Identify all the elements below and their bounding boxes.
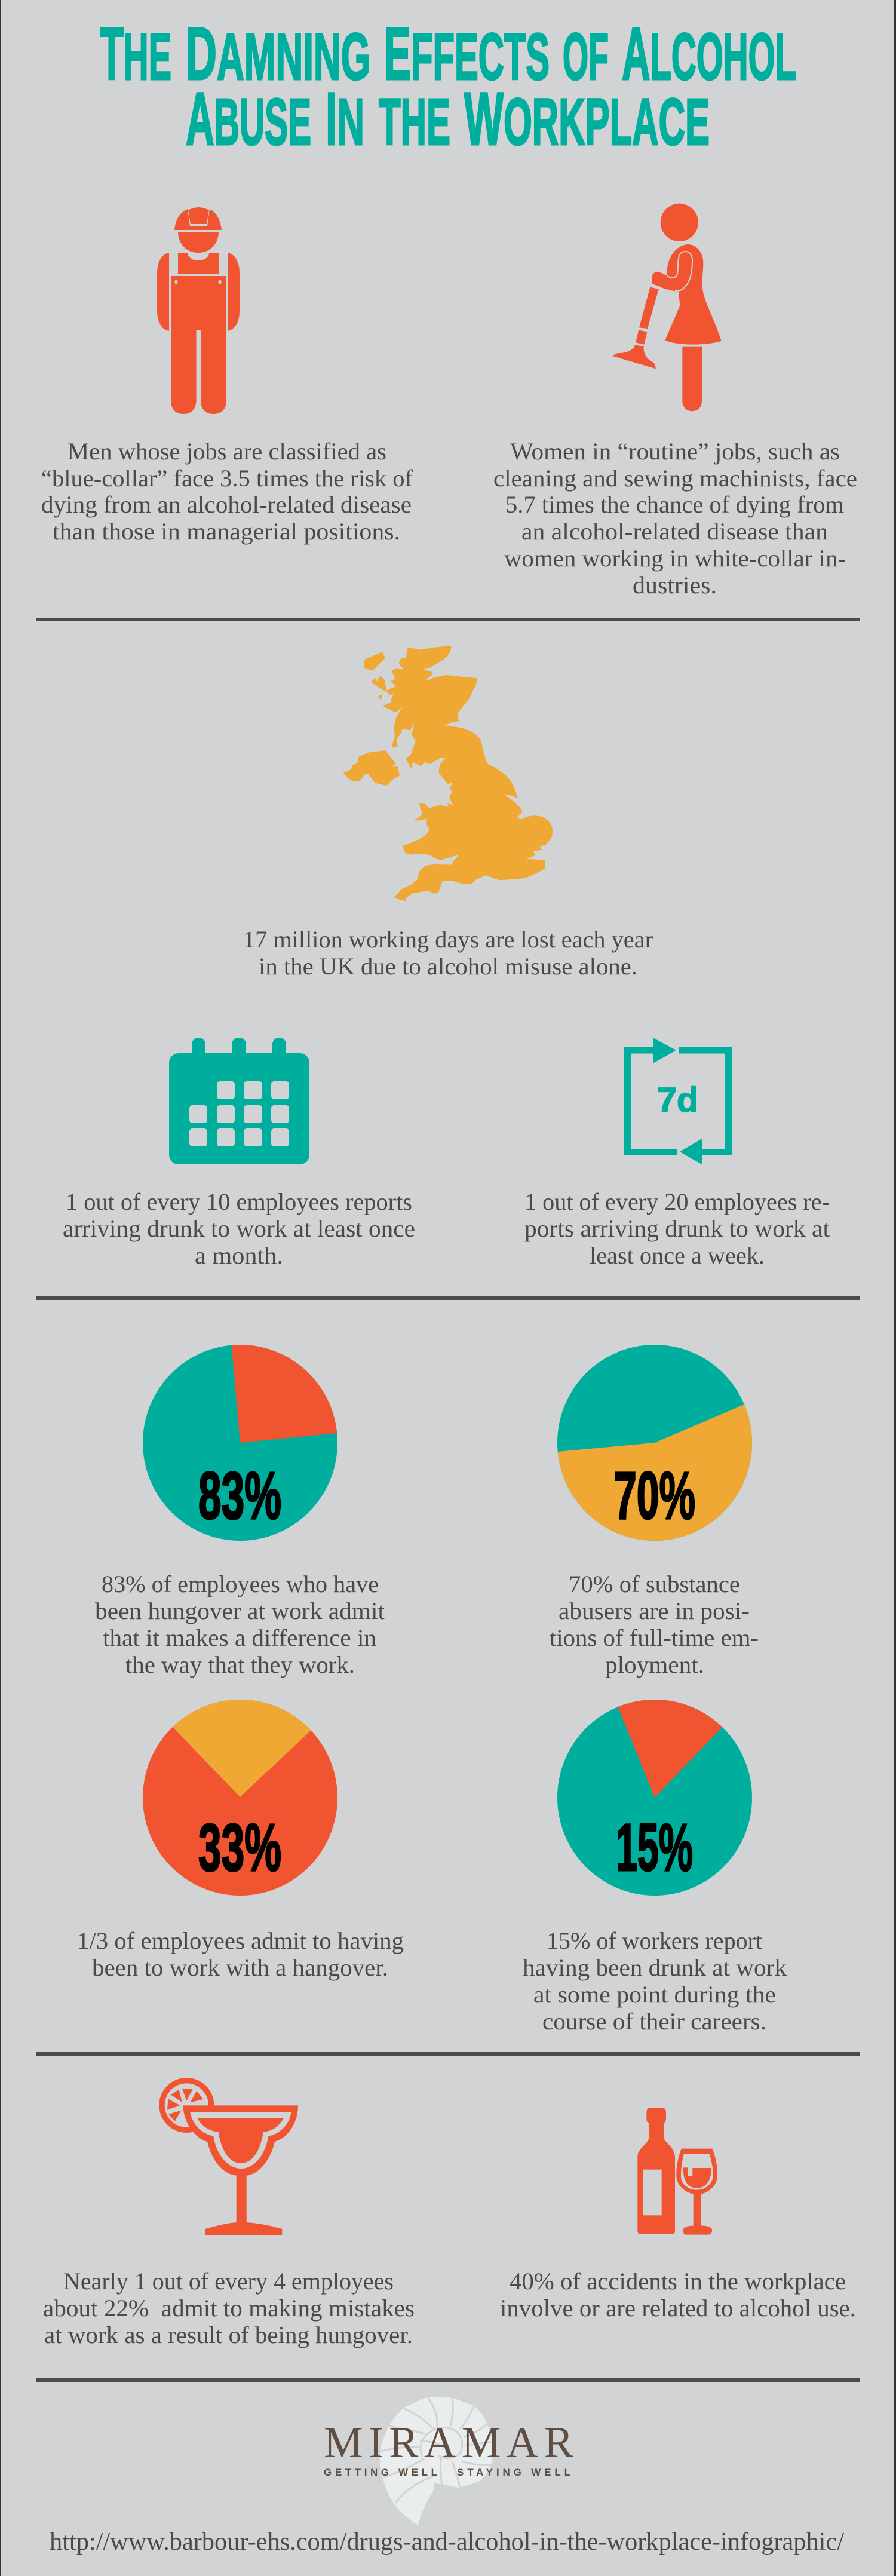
text: blue-collar statistic: Men whose jobs are classified as xyxy=(67,438,386,465)
text: blue-collar statistic: “blue-collar” face 3.5 times the risk of xyxy=(41,465,413,492)
text: 83 percent statistic: that it makes a difference in xyxy=(103,1624,376,1651)
pie chart: 15% xyxy=(557,1700,752,1896)
panel: 33 percent xyxy=(77,1700,404,1981)
text: weekly statistic: least once a week. xyxy=(590,1242,765,1269)
text: routine-job statistic: Women in “routine” jobs, such as xyxy=(510,438,840,465)
icon: calendar xyxy=(169,1038,309,1164)
title: ABUSE xyxy=(186,78,311,161)
panel: routine-job women xyxy=(493,204,857,599)
text: monthly statistic xyxy=(63,1188,415,1269)
logo: Miramar xyxy=(324,2397,574,2525)
icon: seven-day cycle xyxy=(627,1038,729,1164)
text: weekly statistic: 1 out of every 20 employees re- xyxy=(524,1188,830,1215)
text: 70 percent statistic: abusers are in posi- xyxy=(559,1597,750,1624)
title: IN xyxy=(326,78,364,161)
pie chart: 70% xyxy=(557,1345,752,1541)
panel: UK working days xyxy=(243,646,653,980)
icon: nautilus shell xyxy=(380,2397,493,2525)
text: accidents statistic: involve or are related to alcohol use. xyxy=(500,2295,856,2322)
text: weekly statistic xyxy=(524,1188,830,1269)
text: 83 percent statistic: been hungover at work admit xyxy=(95,1597,385,1624)
text: 70 percent statistic: ployment. xyxy=(605,1651,704,1678)
text: 83 percent statistic xyxy=(95,1571,385,1678)
text: accidents statistic: 40% of accidents in the workplace xyxy=(510,2268,846,2295)
text: 15 percent statistic: having been drunk at work xyxy=(523,1954,787,1981)
text: monthly statistic: a month. xyxy=(195,1242,283,1269)
text: 15 percent statistic xyxy=(523,1927,787,2035)
pie chart: 33% xyxy=(143,1700,337,1896)
text: blue-collar statistic: dying from an alcohol-related disease xyxy=(41,491,412,518)
text: hungover mistakes statistic xyxy=(43,2268,415,2348)
wordmark: MIRAMAR xyxy=(324,2418,574,2467)
pie chart: 83%: 83% xyxy=(198,1458,281,1533)
pie chart: 33%: 33% xyxy=(198,1810,281,1885)
title: OF xyxy=(563,20,609,94)
title: THE xyxy=(379,85,450,159)
text: blue-collar statistic xyxy=(41,438,413,545)
pie chart: 83% xyxy=(143,1345,337,1541)
tagline: GETTING WELL xyxy=(324,2467,437,2478)
text: 15 percent statistic: 15% of workers report xyxy=(547,1927,762,1954)
text: 83 percent statistic: the way that they work. xyxy=(125,1651,355,1678)
text: hungover mistakes statistic: Nearly 1 out of every 4 employees xyxy=(63,2268,394,2295)
text: 70 percent statistic: tions of full-time em- xyxy=(550,1624,759,1651)
text: working days lost: 17 million working days are lost each year xyxy=(243,926,653,953)
text: routine-job statistic: cleaning and sewing machinists, face xyxy=(493,465,857,492)
icon: wine bottle and glass xyxy=(637,2108,717,2235)
text: routine-job statistic: dustries. xyxy=(633,572,717,599)
panel: 83 percent xyxy=(95,1345,385,1678)
icon: construction worker xyxy=(157,207,240,414)
panel: drunk once a week xyxy=(524,1038,830,1269)
panel: drunk once a month xyxy=(63,1038,415,1269)
title: WORKPLACE xyxy=(464,78,710,161)
text: hungover mistakes statistic: about 22% admit to making mistakes xyxy=(43,2295,415,2322)
text: accidents statistic xyxy=(500,2268,856,2322)
panel: 70 percent xyxy=(550,1345,759,1678)
text: 15 percent statistic: course of their careers. xyxy=(542,2008,766,2035)
title xyxy=(100,13,796,161)
text: 70 percent statistic xyxy=(550,1571,759,1678)
title: THE xyxy=(100,13,171,96)
pie chart: 15%: 15% xyxy=(616,1810,693,1885)
text: 83 percent statistic: 83% of employees who have xyxy=(102,1571,379,1597)
pie chart: 70%: 70% xyxy=(614,1458,695,1533)
text: hungover mistakes statistic: at work as a result of being hungover. xyxy=(44,2322,413,2348)
text: 15 percent statistic: at some point during the xyxy=(533,1981,776,2008)
source URL: http://www.barbour-ehs.com/drugs-and-alcohol-in-the-workplace-infographic/ xyxy=(50,2528,844,2556)
title: DAMNING xyxy=(186,13,370,96)
text: routine-job statistic xyxy=(493,438,857,599)
title: EFFECTS xyxy=(384,13,550,96)
text: 70 percent statistic: 70% of substance xyxy=(569,1571,740,1597)
icon: cocktail glass xyxy=(159,2078,298,2235)
text: 33 percent statistic: been to work with a hangover. xyxy=(92,1954,388,1981)
text: 33 percent statistic xyxy=(77,1927,404,1981)
text: monthly statistic: arriving drunk to work at least once xyxy=(63,1215,415,1242)
text: working days lost xyxy=(243,926,653,980)
tagline: STAYING WELL xyxy=(457,2467,570,2478)
text: monthly statistic: 1 out of every 10 employees reports xyxy=(66,1188,412,1215)
tagline xyxy=(324,2467,570,2478)
panel: workplace accidents xyxy=(500,2108,856,2322)
panel: blue-collar men xyxy=(41,207,413,545)
text: 33 percent statistic: 1/3 of employees admit to having xyxy=(77,1927,404,1954)
text: routine-job statistic: women working in white-collar in- xyxy=(504,545,846,572)
text: working days lost: in the UK due to alcohol misuse alone. xyxy=(259,953,637,980)
icon: seven-day cycle: 7d xyxy=(657,1081,698,1120)
text: routine-job statistic: an alcohol-related disease than xyxy=(521,518,828,545)
panel: 15 percent xyxy=(523,1700,787,2035)
text: routine-job statistic: 5.7 times the chance of dying from xyxy=(505,491,844,518)
icon: woman with vacuum cleaner xyxy=(613,204,722,411)
panel: mistakes when hungover xyxy=(43,2078,415,2348)
text: weekly statistic: ports arriving drunk to work at xyxy=(524,1215,830,1242)
icon: UK map xyxy=(344,646,552,901)
text: blue-collar statistic: than those in managerial positions. xyxy=(53,518,400,545)
